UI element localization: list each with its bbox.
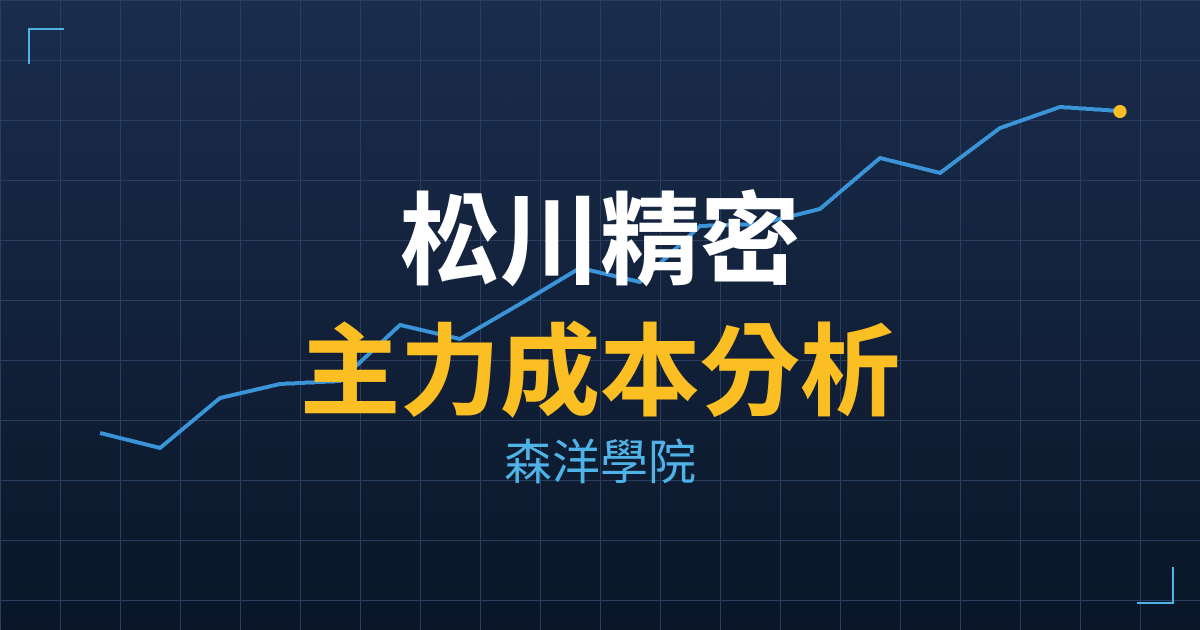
title: company name: 松川精密 (400, 186, 800, 298)
corner bracket: bottom right (1137, 567, 1173, 603)
trend line (100, 107, 1120, 448)
subtitle: analysis topic: 主力成本分析 (300, 317, 900, 429)
end point marker (1113, 105, 1127, 118)
brand: academy name: 森洋學院 (504, 437, 696, 490)
corner bracket: top left (29, 29, 64, 64)
